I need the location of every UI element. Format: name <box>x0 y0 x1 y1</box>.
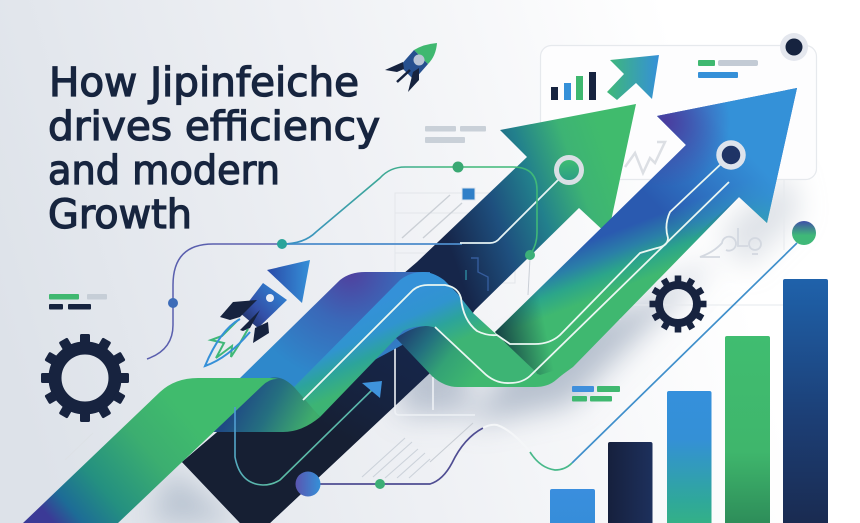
faint grid lower right <box>530 180 790 340</box>
faint vertical connector <box>528 258 530 295</box>
ribbon: front blue-green band <box>293 272 537 417</box>
faint stair chart on dark band <box>466 258 488 291</box>
arrow: green growth arrow <box>182 104 636 523</box>
panel labels <box>698 60 758 78</box>
arrow: blue growth arrow <box>495 88 797 384</box>
bottom growth line <box>320 243 797 484</box>
icon: rocket with flames <box>205 260 310 366</box>
small up arrow <box>607 55 659 100</box>
icon: large gear <box>41 334 129 422</box>
purple-blue node <box>296 472 320 496</box>
white flow lines <box>303 163 729 400</box>
ribbon: fold under green band <box>210 377 320 432</box>
grey text placeholder bars <box>425 126 486 143</box>
title: How Jipinfeiche <box>49 60 359 106</box>
top gradient node <box>792 221 816 245</box>
white frame lines <box>395 332 475 415</box>
U-curve arrow on dark band <box>235 381 382 485</box>
title: drives efficiency <box>48 104 380 150</box>
green node on line <box>375 479 385 489</box>
ribbon: green lower-left band <box>23 378 279 523</box>
connector: blue segment <box>282 243 462 245</box>
bar chart <box>550 279 828 523</box>
dashboard panel <box>540 33 816 180</box>
faint lo glyph doodles <box>700 228 761 257</box>
flames <box>205 319 250 366</box>
icon: small rocket <box>385 43 437 92</box>
left small bars <box>49 294 107 310</box>
hatch marks <box>65 423 473 478</box>
title: Growth <box>48 192 192 238</box>
ring on green arrow <box>556 158 582 182</box>
blue square marker <box>462 188 475 200</box>
right small bars <box>572 386 620 402</box>
faint zigzag sparkline <box>625 142 665 173</box>
mini bar chart <box>551 72 596 100</box>
background shadows <box>150 170 800 523</box>
faint chart: diagonal lines panel <box>395 193 515 283</box>
title <box>48 60 380 238</box>
connector nodes <box>168 162 535 308</box>
dashboard status dot <box>780 33 808 61</box>
connector: white segment to green ring <box>460 180 558 243</box>
ribbon: lower fold <box>396 326 575 387</box>
connector: purple-blue line to rings <box>147 244 460 359</box>
title: and modern <box>48 148 280 194</box>
icon: small gear <box>650 276 706 332</box>
connector: green line over panel <box>282 167 537 255</box>
ring on blue arrow <box>719 143 743 167</box>
ribbon: back purple-blue layer <box>240 272 430 400</box>
